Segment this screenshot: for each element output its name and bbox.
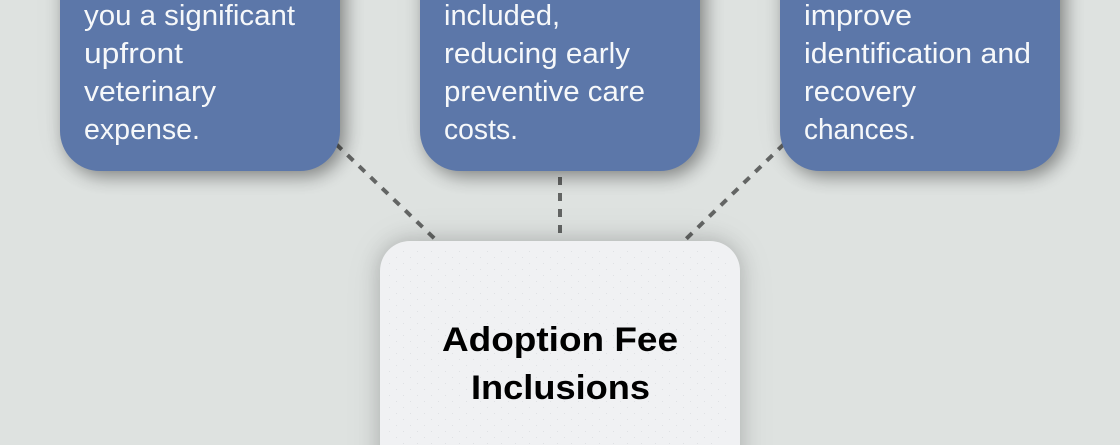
panel: center card: [380, 241, 740, 445]
middle card text: costs.: [444, 114, 518, 146]
right card text: identification and: [804, 38, 1031, 70]
right card text: recovery: [804, 76, 917, 108]
middle card text: included,: [444, 0, 560, 32]
connector: right card to center card: [685, 144, 784, 240]
right card text: chances.: [804, 114, 916, 146]
left card text: expense.: [84, 114, 200, 146]
middle card text: reducing early: [444, 38, 631, 70]
panel: middle card, preventive care costs: [420, 0, 700, 171]
connector: middle card to center card: [558, 177, 562, 241]
left card text: veterinary: [84, 76, 217, 108]
left card text: [84, 0, 295, 146]
left card text: you a significant: [84, 0, 295, 32]
left card text: upfront: [84, 38, 183, 70]
connector: left card to center card: [336, 144, 436, 240]
panel: right card, identification and recovery: [780, 0, 1060, 171]
right card text: [804, 0, 1031, 146]
right card text: improve: [804, 0, 912, 32]
middle card text: [444, 0, 645, 146]
panel: left card, upfront veterinary expense: [60, 0, 340, 171]
middle card text: preventive care: [444, 76, 645, 108]
heading: Adoption Fee Inclusions: Inclusions: [471, 369, 650, 407]
heading: Adoption Fee Inclusions: Adoption Fee: [442, 321, 678, 359]
heading: Adoption Fee Inclusions: [442, 321, 678, 407]
